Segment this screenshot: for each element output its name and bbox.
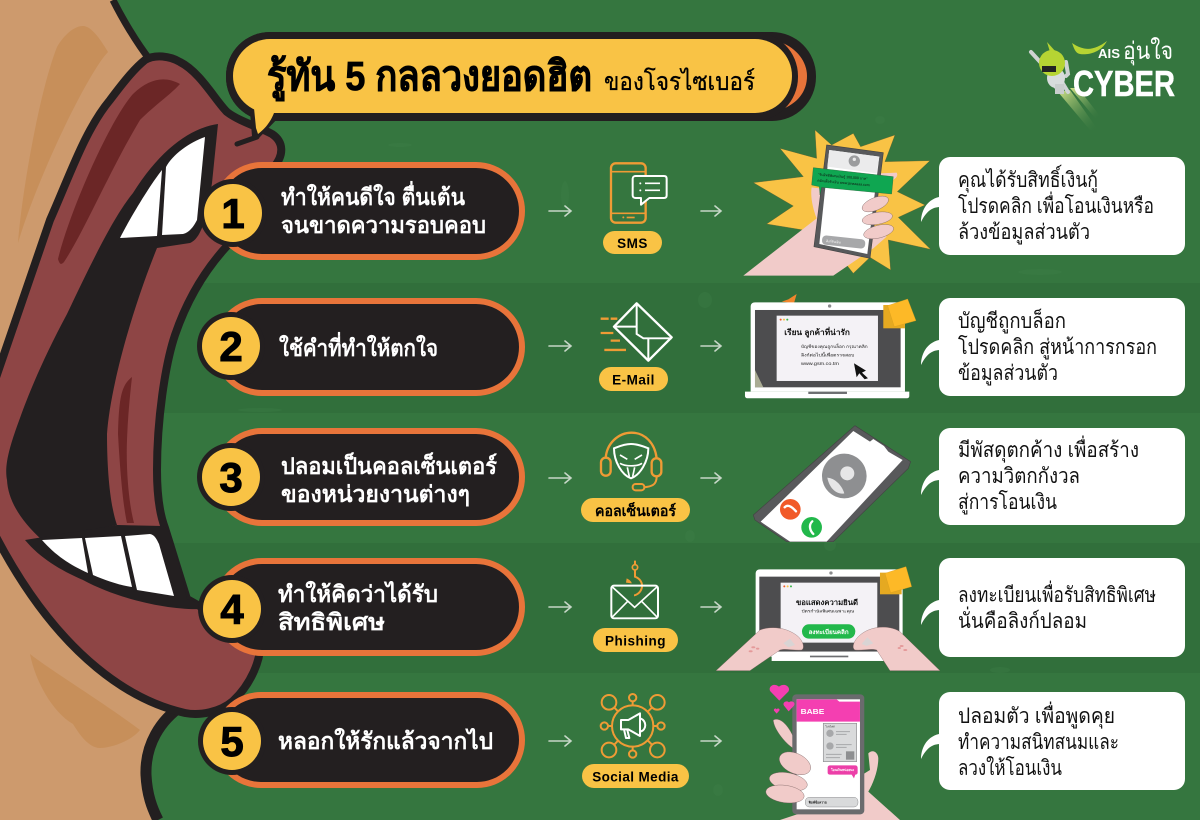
label: E-Mail: E-Mail (612, 372, 655, 388)
row 2 number badge: 2 (219, 323, 243, 370)
row 1 number badge: 1 (221, 190, 245, 237)
logo: AIS Cyber: CYBER (1073, 63, 1175, 104)
row 5 pill (198, 695, 522, 785)
callout 2: ข้อมูลส่วนตัว (958, 362, 1058, 386)
illustration: phone with SMS scam: ลิงก์รับเงิน (826, 239, 842, 245)
callout 5: ลวงให้โอนเงิน (958, 756, 1062, 780)
row 1 heading: ทำให้คนดีใจ ตื่นเต้น (281, 180, 465, 210)
row 3 heading: ปลอมเป็นคอลเซ็นเตอร์ (281, 451, 498, 479)
lower teeth (42, 538, 88, 573)
illustration: incoming call phone (753, 426, 911, 542)
illustration: phone with SMS scam: "รับสิทธิพิเศษเงินกู้ 100,000 บาท" (818, 173, 868, 181)
illustration: laptop with privilege offer and hands: ลงทะเบียนคลิก (809, 628, 849, 636)
row 4 heading: ทำให้คิดว่าได้รับ (278, 580, 438, 607)
mouth interior (6, 124, 218, 540)
title speech bubble (226, 32, 816, 144)
row 3 heading: ของหน่วยงานต่างๆ (281, 481, 470, 507)
lips (0, 56, 281, 714)
callout 3: มีพัสดุตกค้าง เพื่อสร้าง (958, 435, 1139, 463)
illustration: laptop with privilege offer and hands: ขอแสดงความยินดี (796, 598, 858, 607)
label: Social Media: Social Media (592, 770, 679, 784)
label: SMS: SMS (617, 236, 648, 251)
callout 1 (921, 157, 1185, 255)
icon: SMS phone (611, 163, 667, 223)
callout 4: นั่นคือลิงก์ปลอม (958, 606, 1087, 633)
illustration: phone with SMS scam: คลิกเพื่อรับเงิน www.jsnaaaaa.com (817, 178, 870, 187)
callout 3: สู่การโอนเงิน (958, 490, 1057, 515)
callout 1: โปรดคลิก เพื่อโอนเงินหรือ (958, 191, 1154, 218)
skin (0, 0, 180, 820)
illustration: phone with romance scam chat: โปรไฟล์ (825, 724, 835, 728)
callout 4 (921, 558, 1185, 657)
row 4 number badge (198, 575, 266, 643)
row 1 pill (199, 165, 522, 257)
illustration: phone with SMS scam (743, 130, 931, 276)
callout 1: ล้วงข้อมูลส่วนตัว (958, 221, 1090, 245)
logo: AIS Cyber: อุ่นใจ (1123, 37, 1173, 66)
row 4 number badge: 4 (220, 586, 244, 633)
illustration: phone with romance scam chat: BABE (801, 707, 824, 716)
upper teeth (162, 137, 205, 235)
illustration: laptop with phishing mail: ลิงก์ต่อไปนี้เพื่อตรวจสอบ (801, 352, 855, 358)
logo: AIS Cyber (1031, 37, 1175, 130)
callout 2: โปรดคลิก สู่หน้าการกรอก (958, 335, 1157, 360)
row 5 number badge: 5 (220, 718, 244, 765)
illustration: laptop with phishing mail: บัญชีของคุณถูกบล็อก กรุณาคลิก (801, 342, 868, 350)
illustration: phone with romance scam chat: พิมพ์ข้อความ (808, 799, 827, 804)
label: Social Media (582, 764, 689, 788)
callout 2: บัญชีถูกบล็อก (958, 307, 1066, 334)
row 4 pill (198, 561, 522, 653)
row 1 heading: จนขาดความรอบคอบ (281, 212, 486, 238)
title text: รู้ทัน 5 กลลวงยอดฮิต (267, 53, 592, 102)
illustration: phone with romance scam chat: โอนเงินหน่อยนะ (830, 767, 854, 772)
callout 3: ความวิตกกังวล (958, 465, 1080, 488)
callout 5: ปลอมตัว เพื่อพูดคุย (958, 701, 1115, 729)
row 5 heading: หลอกให้รักแล้วจากไป (278, 727, 493, 754)
label: call center: คอลเซ็นเตอร์ (595, 501, 676, 520)
row 1 number badge (199, 179, 267, 247)
illustration: mouth with skin, lips and teeth (0, 0, 281, 820)
label: Phishing: Phishing (605, 634, 666, 648)
row 5 number badge (198, 707, 266, 775)
label: call center (581, 498, 690, 522)
row 4 heading: สิทธิพิเศษ (278, 609, 385, 635)
label: E-Mail (599, 367, 668, 391)
illustration: laptop with privilege offer and hands: บัตรกำนัลพิเศษเฉพาะคุณ (802, 609, 855, 615)
callout 1: คุณได้รับสิทธิ์เงินกู้ (958, 164, 1098, 193)
row 3 pill (197, 431, 522, 523)
row 3 number badge (197, 443, 265, 511)
illustration: phone with romance scam chat (765, 685, 900, 820)
callout 5 (921, 692, 1185, 790)
row 2 heading: ใช้คำที่ทำให้ตกใจ (279, 331, 438, 361)
label: Phishing (593, 628, 678, 652)
icon: phishing hook envelope (611, 561, 658, 618)
callout 2 (921, 298, 1185, 396)
arrows (549, 206, 721, 746)
callout 4: ลงทะเบียนเพื่อรับสิทธิพิเศษ (958, 580, 1156, 607)
illustration: laptop with phishing mail: www.gsm.co.tm (801, 361, 839, 366)
illustration: laptop with phishing mail (745, 294, 916, 398)
icon: E-Mail envelope (601, 303, 672, 361)
title subtext: ของโจรไซเบอร์ (604, 67, 755, 96)
callout 5: ทำความสนิทสนมและ (958, 731, 1119, 754)
callout 3 (921, 428, 1185, 525)
row 2 pill (197, 301, 522, 393)
icon: social media megaphone network (601, 694, 665, 758)
row 3 number badge: 3 (219, 454, 243, 501)
label: SMS (603, 231, 662, 254)
illustration: laptop with phishing mail: เรียน ลูกค้าที่น่ารัก (784, 326, 850, 338)
row 2 number badge (197, 312, 265, 380)
icon: call center mask headset (601, 433, 661, 490)
logo: AIS Cyber: AIS (1098, 46, 1120, 61)
illustration: laptop with privilege offer and hands (716, 567, 940, 671)
